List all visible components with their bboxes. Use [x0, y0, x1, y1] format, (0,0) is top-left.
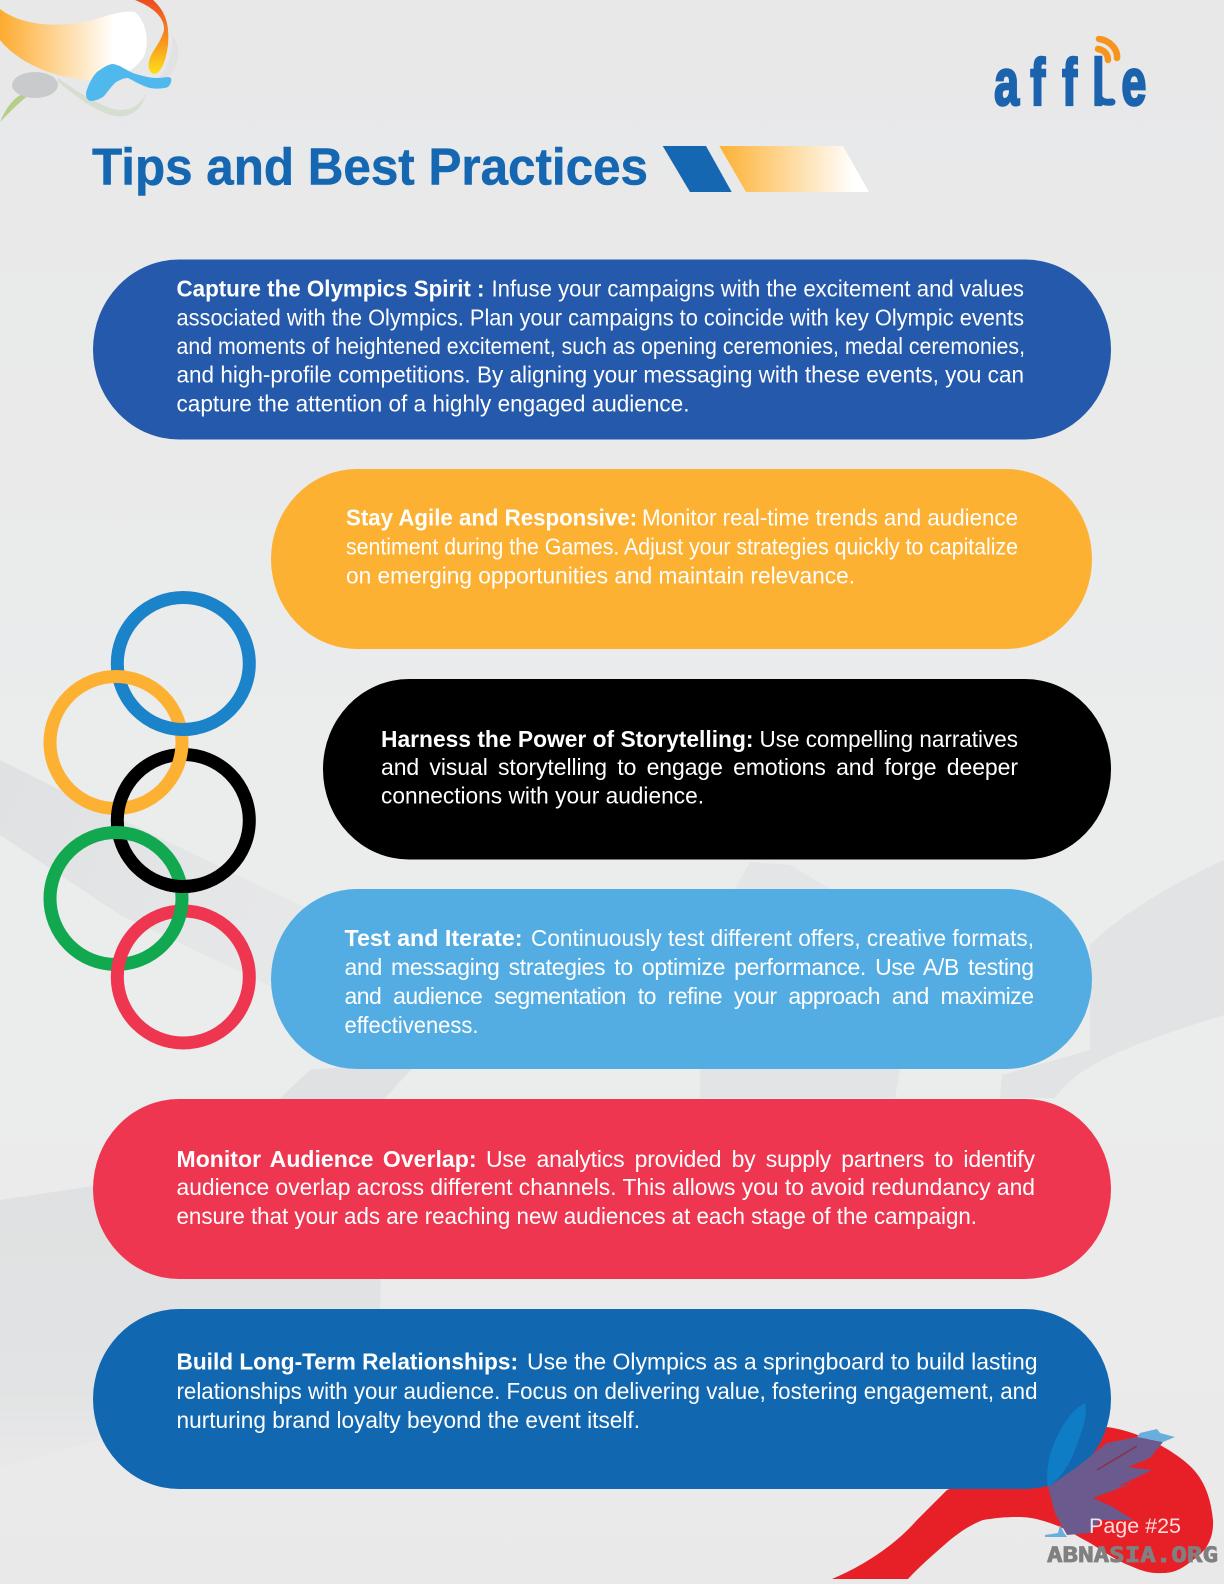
panel: Capture the Olympics Spirit — [93, 260, 1111, 440]
panel: Harness the Power of Storytelling: Harness the Power of Storytelling: — [381, 726, 754, 752]
panel: Harness the Power of Storytelling: connections with your audience. — [381, 782, 704, 808]
panel: Capture the Olympics Spirit: associated with the Olympics. Plan your campaigns to coincide with key Olympic events — [176, 304, 1024, 330]
panel: Test and Iterate: effectiveness. — [344, 1012, 478, 1038]
panel: Monitor Audience Overlap: Monitor Audience Overlap: — [176, 1146, 476, 1172]
decorative red wave: bottom right — [832, 1427, 1213, 1579]
decorative torch art: top left — [0, 0, 178, 122]
panel: Stay Agile and Responsive — [271, 469, 1092, 649]
panel: Build Long-Term Relationships — [93, 1309, 1111, 1489]
panel: Monitor Audience Overlap: audience overlap across different channels. This allows you to avoid redundancy and — [176, 1174, 1035, 1200]
blue swoosh — [86, 64, 171, 101]
panel: Monitor Audience Overlap: Use analytics provided by supply partners to identify — [486, 1146, 1036, 1172]
icon: wifi signal — [1098, 39, 1117, 60]
panel: Capture the Olympics Spirit: and moments of heightened excitement, such as opening ceremonies, medal ceremonies, — [176, 333, 1025, 359]
panel: Stay Agile and Responsive: Monitor real-time trends and audience — [642, 504, 1018, 530]
soft shadow — [150, 35, 178, 88]
panel: Monitor Audience Overlap: ensure that your ads are reaching new audiences at each stage of the campaign. — [176, 1203, 977, 1229]
grey blob — [12, 72, 58, 98]
green stem — [58, 78, 147, 116]
watermark: ABNASIA.ORG — [1047, 1543, 1218, 1567]
logo l foot — [1099, 97, 1112, 102]
flame — [135, 0, 168, 74]
panel: Harness the Power of Storytelling: and visual storytelling to engage emotions and forge deeper — [381, 754, 1018, 780]
wing tips — [1137, 1429, 1175, 1442]
panel: Capture the Olympics Spirit: Capture the Olympics Spirit : — [176, 276, 484, 302]
decorative feather figure: bottom right — [1045, 1403, 1175, 1537]
panel: Stay Agile and Responsive: sentiment during the Games. Adjust your strategies quickly to capitalize — [346, 534, 1018, 560]
panel: Test and Iterate: Test and Iterate: — [344, 925, 522, 951]
panel: Harness the Power of Storytelling — [323, 679, 1111, 860]
orange blob — [0, 9, 147, 80]
page number: Page #25 — [1089, 1515, 1181, 1538]
panel: Build Long-Term Relationships: relationships with your audience. Focus on delivering value, fostering engagement, and — [176, 1378, 1038, 1404]
panel: Build Long-Term Relationships: nurturing brand loyalty beyond the event itself. — [176, 1407, 640, 1433]
vertical feather — [1047, 1403, 1086, 1487]
panel: Monitor Audience Overlap — [93, 1099, 1111, 1279]
panel: Capture the Olympics Spirit: capture the attention of a highly engaged audience. — [176, 390, 690, 416]
title accent bars — [663, 146, 869, 192]
panel: Stay Agile and Responsive: on emerging opportunities and maintain relevance. — [346, 562, 855, 588]
title: Tips and Best Practices — [92, 138, 648, 196]
panel: Build Long-Term Relationships: Use the Olympics as a springboard to build lasting — [527, 1348, 1038, 1374]
panel: Capture the Olympics Spirit: and high-profile competitions. By aligning your messaging with these events, you can — [176, 362, 1024, 388]
panel: Capture the Olympics Spirit: Infuse your campaigns with the excitement and values — [492, 276, 1024, 302]
panel: Harness the Power of Storytelling: Use compelling narratives — [760, 726, 1018, 752]
panel: Stay Agile and Responsive: Stay Agile and Responsive: — [346, 504, 637, 530]
panel: Build Long-Term Relationships: Build Long-Term Relationships: — [176, 1348, 518, 1374]
panel: Test and Iterate: and audience segmentation to refine your approach and maximize — [344, 983, 1034, 1009]
wing streak — [1097, 1446, 1137, 1470]
panel: Test and Iterate — [271, 889, 1092, 1069]
olympic rings — [50, 598, 249, 1043]
logo: affle: affle — [994, 45, 1146, 119]
panel: Test and Iterate: Continuously test different offers, creative formats, — [531, 925, 1034, 951]
wing — [1048, 1437, 1163, 1535]
feather base — [1045, 1525, 1067, 1537]
panel: Test and Iterate: and messaging strategies to optimize performance. Use A/B testing — [344, 954, 1034, 980]
